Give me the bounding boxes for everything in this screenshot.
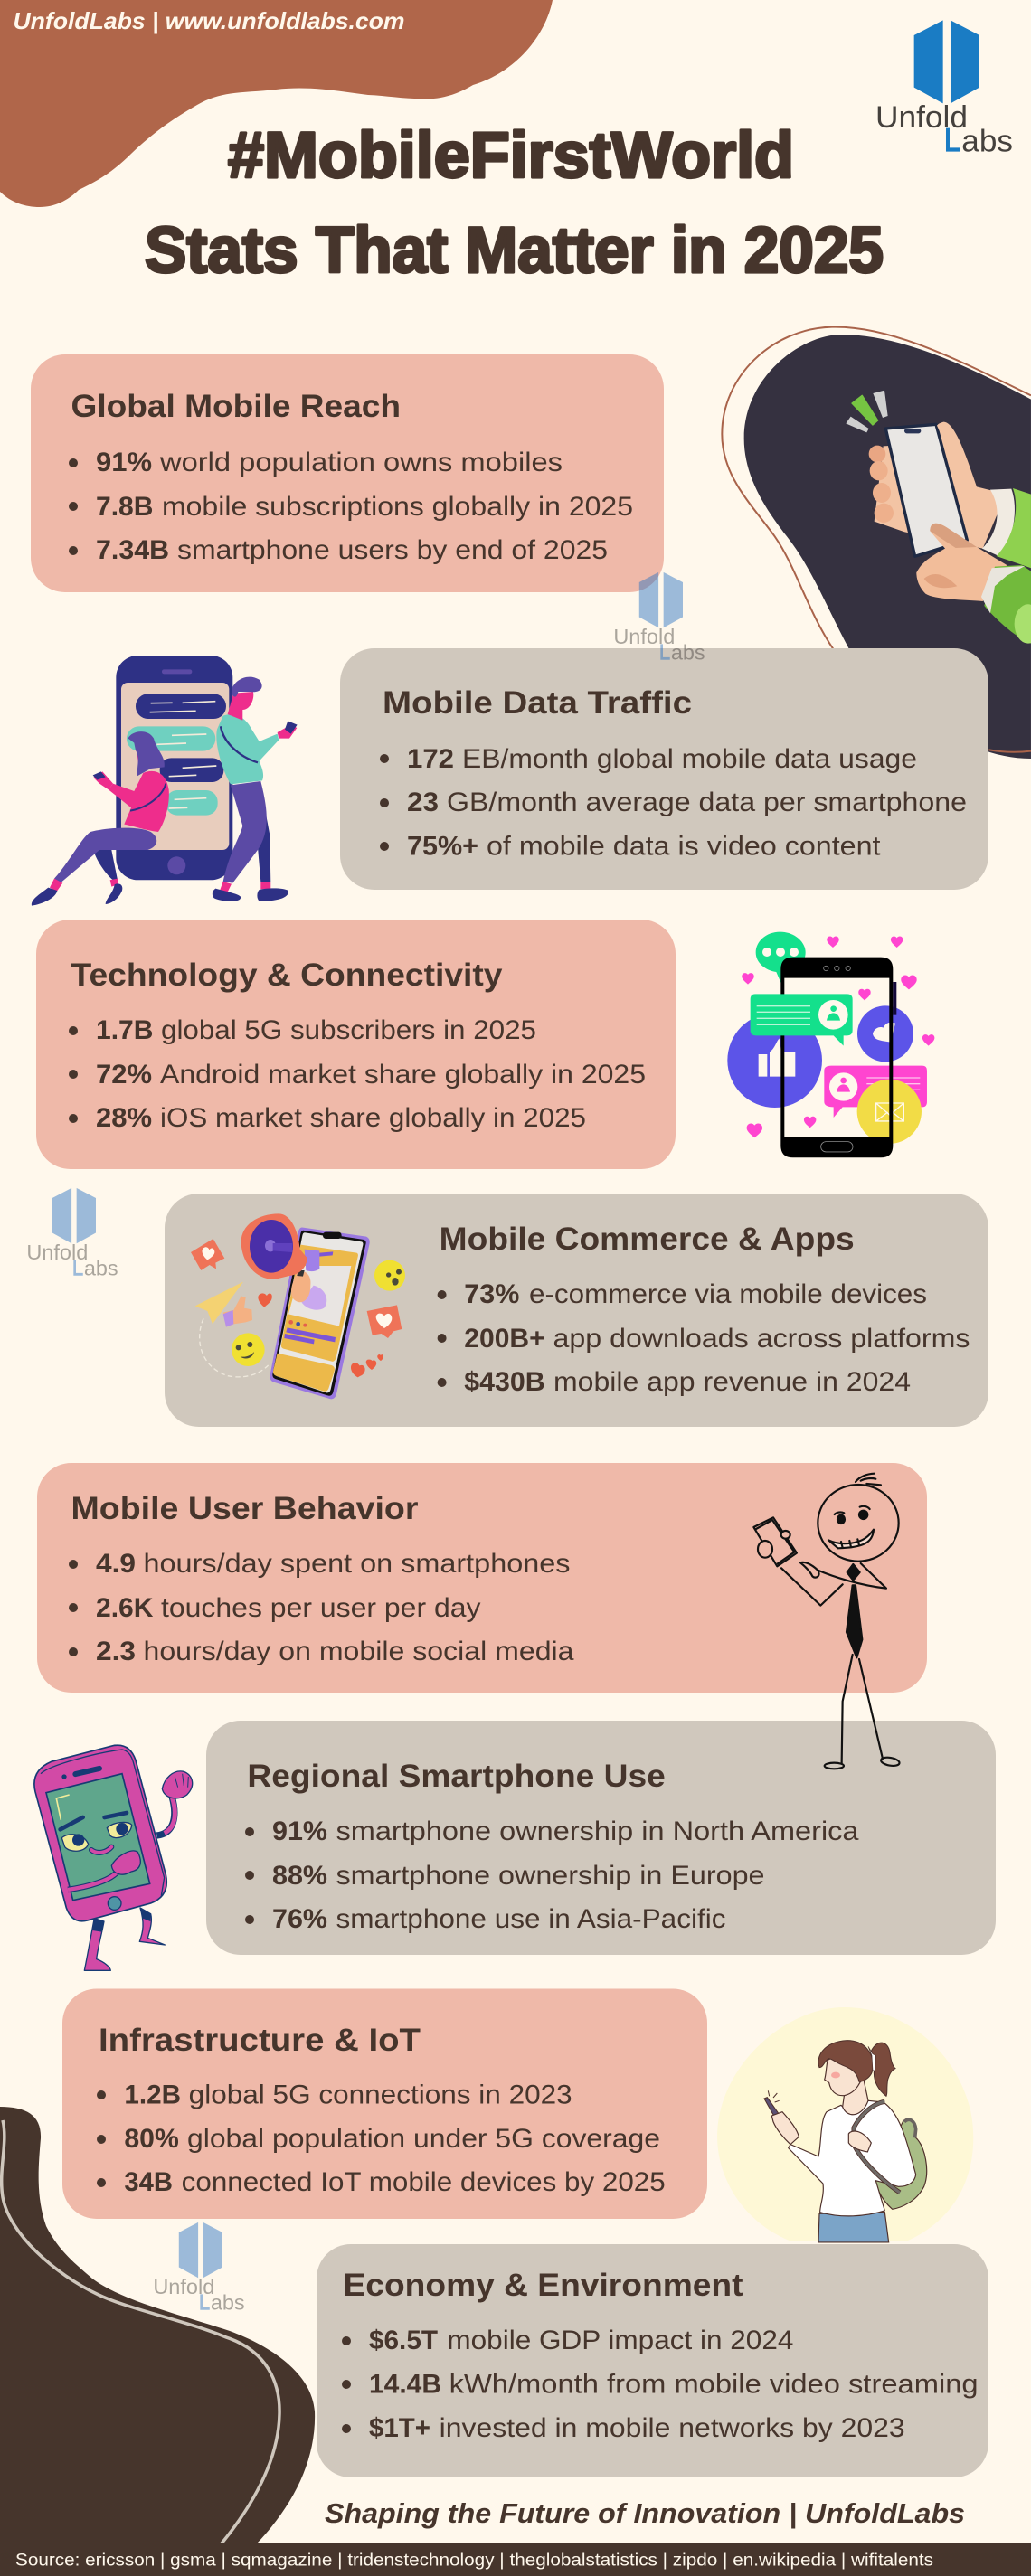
stat: 1.2B: 1.2B [124,2080,181,2110]
stat: 2.3 hours: 2.3 [96,1637,136,1666]
watermark logo 3: abs [211,2291,245,2315]
stat: 72%: 72% [96,1060,152,1090]
stat: 88% Europe: smartphone ownership in Europe [336,1861,765,1891]
stat: 4.9 hours: 4.9 [96,1549,136,1579]
stat: 200B+: 200B+ [464,1324,545,1354]
stat: 73%: 73% [464,1279,519,1309]
stat: 28%: 28% [96,1103,152,1133]
stat: 72%: Android market share globally in 2025 [160,1060,646,1090]
panel: Mobile User Behavior [37,1463,927,1693]
stat: 76% Asia-Pacific: smartphone use in Asia-Pacific [336,1904,725,1934]
stat: 28%: iOS market share globally in 2025 [160,1103,586,1133]
decorative blob: top-left brown [0,0,553,207]
stat: 23 GB: 23 [407,788,439,817]
stat: 34B: connected IoT mobile devices by 2025 [182,2167,666,2197]
stat: 172 EB: 172 [407,744,454,774]
stat: 34B: 34B [124,2167,173,2197]
logo: UnfoldLabs [875,20,1013,158]
watermark logo 2 [26,1188,118,1280]
stat: $1T+: $1T+ [369,2413,430,2443]
illustration: phone with megaphone and emojis [191,1213,405,1399]
watermark logo 2: Unfold [26,1241,88,1264]
stat: 76% Asia-Pacific: 76% [272,1904,327,1934]
watermark logo 1: abs [671,641,705,665]
heading: Mobile User Behavior [71,1491,419,1526]
panel: Regional Smartphone Use [206,1721,996,1955]
title: #MobileFirstWorld [228,120,794,192]
watermark logo 3 [153,2222,245,2315]
heading: Technology & Connectivity [71,958,503,993]
decorative blob: bottom-left dark brown [0,2107,315,2543]
panel: Technology & Connectivity [36,920,676,1169]
decorative blob: dark shape with outline behind the hand illustration [722,327,1031,759]
stat: $6.5T: $6.5T [369,2326,438,2355]
stat: 14.4B: kWh/month from mobile video streaming [449,2370,979,2400]
stat: 172 EB: EB/month global mobile data usage [462,744,917,774]
heading: Regional Smartphone Use [247,1759,666,1794]
stat: 91% North America: 91% [272,1816,327,1846]
stat: $430B: mobile app revenue in 2024 [553,1367,911,1397]
heading: Global Mobile Reach [71,389,401,424]
stat: 1.2B: global 5G connections in 2023 [189,2080,572,2110]
stat: 7.34B: 7.34B [96,535,169,565]
panel: Global Mobile Reach [31,354,664,592]
stat: 2.6K: touches per user per day [161,1593,481,1623]
heading: Infrastructure & IoT [99,2023,421,2058]
illustration: two people with giant phone [32,656,298,906]
illustration: yellow blob with girl and backpack [717,2007,973,2242]
stat: 91% North America: smartphone ownership in North America [336,1816,859,1846]
stat: $6.5T: mobile GDP impact in 2024 [447,2326,793,2355]
stat: 23 GB: GB/month average data per smartphone [447,788,967,817]
illustration: 3D hands holding a smartphone [846,391,1031,644]
panel: Mobile Data Traffic [340,648,988,890]
stat: 88% Europe: 88% [272,1861,327,1891]
watermark logo 3: Unfold [153,2275,214,2298]
watermark logo 1 [613,572,705,665]
stat: $430B: $430B [464,1367,545,1397]
illustration: cartoon phone character [34,1745,193,1970]
logo: UnfoldLabs: Unfold [875,100,968,135]
heading: Economy & Environment [344,2268,743,2303]
stat: 7.34B: smartphone users by end of 2025 [177,535,608,565]
stat: 4.9 hours: hours/day spent on smartphones [143,1549,570,1579]
illustration: stick man with phone [753,1474,900,1769]
heading: Mobile Data Traffic [383,685,692,721]
panel: Economy & Environment [317,2244,988,2477]
stat: 91%: 91% [96,448,152,477]
panel: Infrastructure & IoT [62,1989,707,2219]
stat: 7.8B: 7.8B [96,492,153,522]
heading: Mobile Commerce & Apps [440,1222,855,1257]
title [145,120,884,287]
title: Stats That Matter in 2025 [145,215,884,287]
header website text: UnfoldLabs | www.unfoldlabs.com [13,7,405,34]
watermark logo 1: Unfold [613,625,675,648]
logo: UnfoldLabs: abs [961,124,1013,158]
stat: 75%+: of mobile data is video content [487,832,881,861]
illustration: phone with social media bubbles [727,932,934,1157]
stat: 1.7B: global 5G subscribers in 2025 [161,1015,536,1045]
stat: 80%: global population under 5G coverage [187,2124,660,2154]
panel: Mobile Commerce & Apps [165,1194,988,1427]
stat: 2.3 hours: hours/day on mobile social media [143,1637,574,1666]
stat: 14.4B: 14.4B [369,2370,441,2400]
stat: $1T+: invested in mobile networks by 2023 [440,2413,905,2443]
stat: 73%: e-commerce via mobile devices [529,1279,927,1309]
stat: 1.7B: 1.7B [96,1015,153,1045]
stat: 91%: world population owns mobiles [159,448,563,477]
footer: sources bar [0,2543,1031,2576]
stat: 200B+: app downloads across platforms [553,1324,970,1354]
watermark logo 2: abs [84,1257,118,1280]
stat: 75%+: 75%+ [407,832,478,861]
stat: 2.6K: 2.6K [96,1593,154,1623]
stat: 80%: 80% [124,2124,179,2154]
footer: sources bar: Source: ericsson | gsma | sqmagazine | tridenstechnology | theglobalstatistics | zipdo | en.wikipedia | wifitalents [15,2552,933,2570]
stat: 7.8B: mobile subscriptions globally in 2025 [162,492,633,522]
tagline: Shaping the Future of Innovation | UnfoldLabs [325,2497,965,2529]
